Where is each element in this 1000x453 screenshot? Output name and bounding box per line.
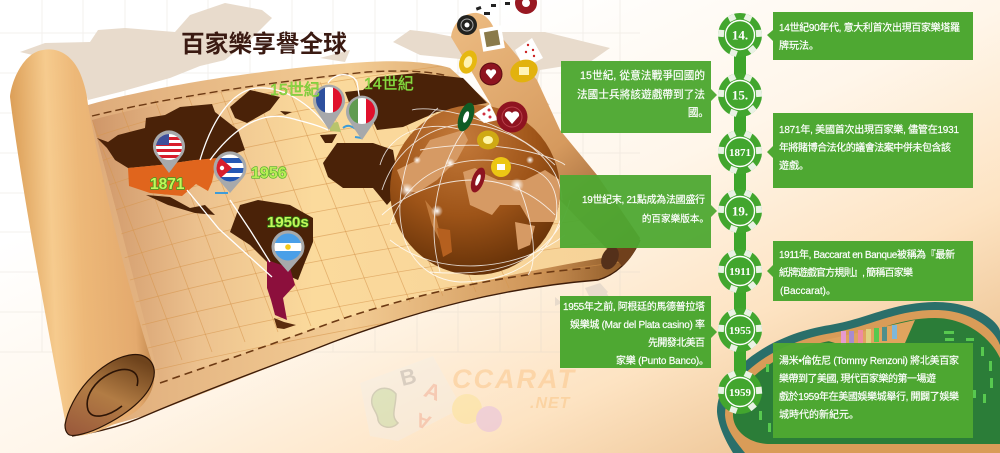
left roll xyxy=(10,49,154,436)
watermark cards: B xyxy=(397,363,419,391)
spades xyxy=(476,2,510,15)
globe xyxy=(380,105,570,282)
label: 1956: 1956 xyxy=(251,165,287,182)
box: 1955: 娛樂城 (Mar del Plata casino) 率 xyxy=(570,318,705,331)
chip red top xyxy=(515,0,537,14)
box: 1959 xyxy=(773,343,973,438)
chip: 1959 xyxy=(718,370,762,414)
box: 15世紀: 國。 xyxy=(688,107,709,119)
box: 15世紀: 15世紀, 從意法戰爭回國的 xyxy=(580,69,705,82)
greenland xyxy=(230,90,280,123)
central america xyxy=(146,195,215,215)
chip: 14 xyxy=(718,13,762,57)
label: 1871: 1871 xyxy=(150,176,185,193)
stitched border bottom xyxy=(160,268,590,383)
right scroll band xyxy=(451,13,640,266)
roll spiral xyxy=(87,370,138,416)
box: 14世紀: 14世紀90年代, 意大利首次出現百家樂塔羅 xyxy=(779,21,960,34)
card diamonds xyxy=(474,104,498,123)
flying chips and cards xyxy=(454,0,543,194)
pin: italy xyxy=(346,96,378,140)
watermark .NET: .NET xyxy=(530,395,571,412)
watermark cards: A xyxy=(421,377,444,406)
card spots xyxy=(482,108,492,118)
box: 19世紀 xyxy=(560,175,717,248)
eurasia xyxy=(345,73,487,130)
italy waterway xyxy=(215,126,362,193)
europe light xyxy=(330,122,341,132)
iceland xyxy=(280,111,292,115)
box: 1871: 1871年, 美國首次出現百家樂, 儘管在1931 xyxy=(779,123,959,136)
parchment sheet xyxy=(60,61,640,436)
box: 1871: 年將賭博合法化的議會法案中併未包含該 xyxy=(779,141,951,154)
watermark cards xyxy=(360,356,502,441)
box: 14世紀: 牌玩法。 xyxy=(779,39,819,52)
box: 1871: 遊戲。 xyxy=(779,159,809,172)
card red xyxy=(515,38,543,68)
band roll end xyxy=(598,244,622,272)
poker table xyxy=(717,302,1000,453)
chip: 19: 19. xyxy=(732,204,748,218)
chip: 1955 xyxy=(718,308,762,352)
spain xyxy=(320,134,337,143)
box: 19世紀: 的百家樂版本。 xyxy=(642,213,709,225)
globe land xyxy=(397,130,560,257)
box: 1871 xyxy=(767,113,973,188)
scroll map xyxy=(10,40,640,436)
pin: argentina xyxy=(272,230,305,272)
chip red big xyxy=(496,102,528,132)
chip: 15: 15. xyxy=(732,88,748,102)
chip: 1871 xyxy=(718,130,762,174)
chip: 14: 14. xyxy=(732,28,748,42)
title: 百家樂享譽全球 xyxy=(181,31,347,58)
chip gold right xyxy=(507,56,541,86)
pin: usa xyxy=(153,130,185,173)
chip: 1911: 1911 xyxy=(729,266,751,278)
chip gold low xyxy=(491,157,511,177)
box: 1911 xyxy=(767,241,973,301)
migration arcs xyxy=(187,75,361,277)
background grid xyxy=(0,0,640,352)
chip: 1955: 1955 xyxy=(729,325,752,337)
south america tip xyxy=(274,318,296,329)
card jack xyxy=(479,25,505,52)
chip: 1959: 1959 xyxy=(729,387,752,399)
watermark cards: A xyxy=(413,408,434,433)
box: 1955 xyxy=(560,296,717,368)
globe network lines xyxy=(380,108,570,282)
chip dark red xyxy=(468,166,488,194)
box: 1959: 湯米•倫佐尼 (Tommy Renzoni) 將北美百家 xyxy=(779,354,959,367)
chip: 15 xyxy=(718,73,762,117)
label: 1950s: 1950s xyxy=(267,214,309,231)
roll end xyxy=(65,355,154,435)
globe glows xyxy=(400,156,534,217)
box: 14世紀 xyxy=(767,12,973,60)
box: 1911: (Baccarat)。 xyxy=(780,286,836,297)
north america xyxy=(97,104,245,168)
box: 1955: 先開發北美百 xyxy=(648,336,705,349)
box: 15世紀 xyxy=(561,61,717,133)
label: 14世紀: 14世紀 xyxy=(364,75,414,93)
usa xyxy=(128,158,217,196)
timeline connector xyxy=(734,35,746,392)
watermark text: CCARAT xyxy=(452,364,576,394)
map grid xyxy=(80,40,620,370)
box: 1959: 戲於1959年在美國娛樂城舉行, 開闢了娛樂 xyxy=(779,390,959,403)
box: 15世紀: 法國士兵將該遊戲帶到了法 xyxy=(577,88,705,101)
bottom edge xyxy=(72,240,640,436)
box: 1911: 紙牌遊戲官方規則』, 簡稱百家樂 xyxy=(779,266,913,279)
chip gold mid xyxy=(477,130,499,150)
argentina xyxy=(267,260,295,320)
box: 19世紀: 19世紀末, 21點成為法國盛行 xyxy=(582,193,705,206)
box: 1959: 樂帶到了美國, 現代百家樂的第一場遊 xyxy=(779,372,936,385)
africa xyxy=(323,143,400,205)
label: 15世紀: 15世紀 xyxy=(270,81,320,99)
chip: 1871: 1871 xyxy=(729,147,751,159)
chip: 19 xyxy=(718,189,762,233)
box: 1955: 1955年之前, 阿根廷的馬德普拉塔 xyxy=(563,300,705,313)
pale world map xyxy=(20,3,612,306)
chip gold left xyxy=(456,48,480,76)
chip red heart xyxy=(480,63,502,85)
chip black xyxy=(457,15,477,35)
south america xyxy=(230,200,313,280)
chip green xyxy=(454,101,478,133)
box: 1959: 城時代的新紀元。 xyxy=(779,408,859,421)
box: 1955: 家樂 (Punto Banco)。 xyxy=(616,354,709,367)
watermark xyxy=(360,356,576,441)
chip: 1911 xyxy=(718,249,762,293)
box: 1911: 1911年, Baccarat en Banque被稱為『最新 xyxy=(779,248,955,261)
stitched border top xyxy=(92,71,448,116)
parchment inner map area xyxy=(92,73,620,382)
pin: cuba xyxy=(213,151,246,193)
pin: france xyxy=(313,85,345,130)
